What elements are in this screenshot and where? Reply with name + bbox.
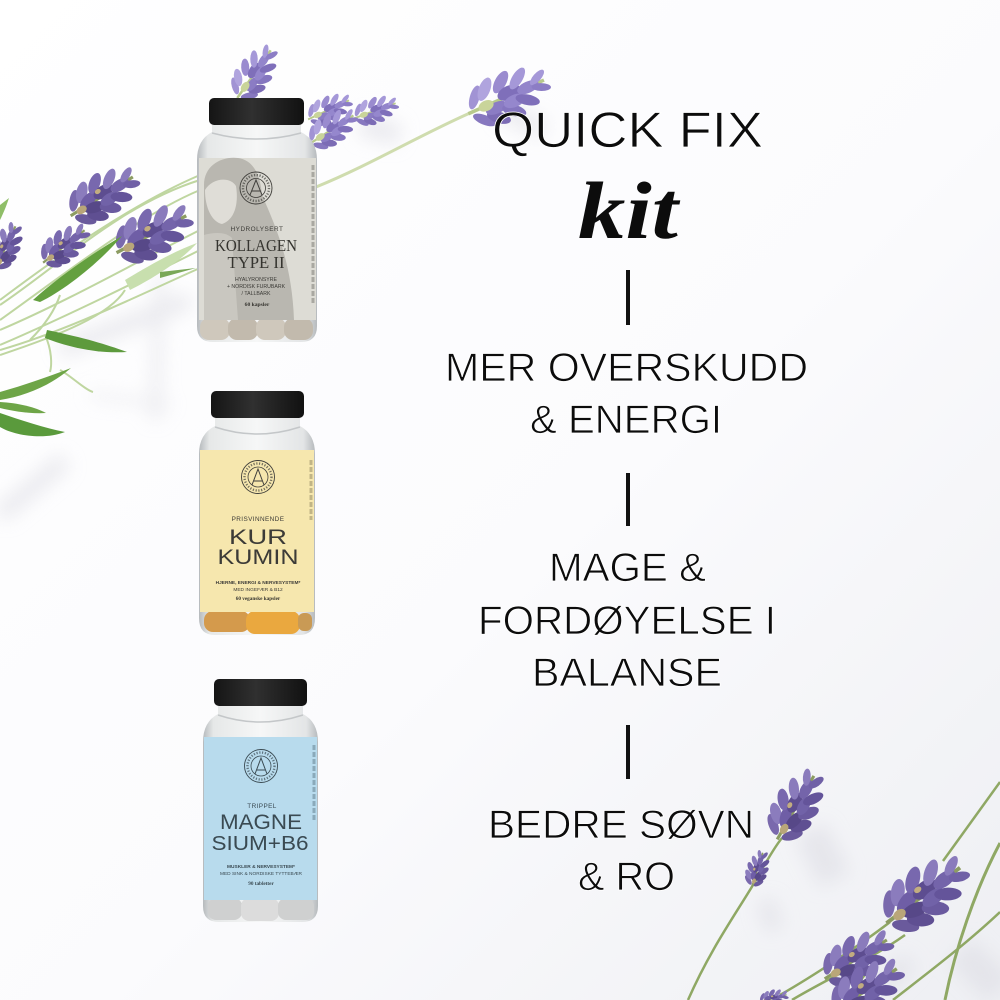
label text: HYALYRONSYRE [235,277,277,283]
lavender head small [740,847,775,891]
tablets [208,898,314,921]
benefit: energy [445,346,808,442]
benefit: energy: MER OVERSKUDD [445,346,808,390]
side print [310,460,312,520]
lavender head E [755,759,838,852]
lavender and leaves: left bunch [0,153,204,436]
lavender head bottom [757,985,791,1000]
neck ring [218,715,303,722]
label text: MUSKLER & NERVESYSTEM* [227,864,295,870]
label [199,158,316,320]
side print [312,165,314,305]
label text: MED INGEFÆR & B12 [233,587,283,593]
jar: Kurkumin [199,391,315,635]
divider 1 [626,270,630,325]
jar: Magnesium + B6 [203,679,318,922]
title: QUICK FIX: QUICK FIX [492,102,763,158]
stem to head behind jar [316,113,470,187]
lavender head B [32,214,98,277]
portrait face [205,180,237,224]
label text: HYDROLYSERT [231,226,283,233]
label [200,450,314,612]
label text: TYPE II [228,253,285,272]
lavender head: behind jar right [349,88,403,132]
label text: + NORDISK FURUBARK [227,284,286,290]
label [204,737,317,900]
jar cap [214,679,307,706]
label text: 60 veganske kapsler [236,596,281,602]
jar body [199,416,315,635]
lavender head G [811,916,904,1000]
logo [244,750,278,782]
label text: 60 kapsler [245,302,270,308]
lavender head A [57,153,150,237]
title: kit: kit [578,165,681,256]
portrait [204,158,294,320]
label text: KUR [229,526,287,549]
label text [216,516,300,602]
lavender sprigs: top left of the jar [221,36,560,187]
benefit: sleep: & RO [578,855,675,899]
divider 2 [626,473,630,526]
leaves [0,198,197,436]
label text: / TALLBARK [242,291,271,297]
divider 3 [626,725,630,779]
lavender: bottom right [688,759,1000,1000]
benefit: digestion [478,546,776,695]
lavender head F [867,838,984,949]
neck ring [212,133,301,139]
stems [0,175,200,392]
label text [212,803,308,887]
label text: HJERNE, ENERGI & NERVESYSTEM* [216,580,300,586]
capsules [200,318,313,340]
benefit: digestion: MAGE & [549,546,706,590]
side print [312,745,316,820]
label text: SIUM+B6 [212,833,308,855]
label text: KOLLAGEN [215,236,297,255]
label text [215,226,297,308]
portrait shoulder [204,233,238,320]
neck ring [215,427,300,434]
benefit: sleep: BEDRE SØVN [488,803,754,847]
lavender head H [818,944,916,1000]
lavender head D [0,217,31,276]
lavender head: behind jar lower [300,99,366,158]
lavender head: long stem [457,52,560,139]
jar body [203,704,318,922]
jar cap [211,391,304,418]
jar body [197,124,317,342]
stems [688,782,1000,1000]
label text: KUMIN [218,546,298,569]
benefit: digestion: FORDØYELSE I [478,599,776,643]
benefit: digestion: BALANSE [532,651,722,695]
lavender head: behind jar upper [302,85,358,133]
jar: Kollagen Type II [197,98,317,342]
label text: PRISVINNENDE [232,516,284,523]
logo [240,172,272,204]
benefit: energy: & ENERGI [530,398,722,442]
lavender head: top centre [221,36,289,109]
label text: MED SINK & NORDISKE TYTTEBÆR [220,871,303,877]
label text: 90 tabletter [248,881,274,887]
benefit: sleep [488,803,754,899]
jar cap [209,98,304,125]
capsules [204,611,312,634]
label text: TRIPPEL [247,803,277,810]
logo [242,460,274,494]
label text: MAGNE [220,811,302,834]
lavender head C [103,189,204,277]
